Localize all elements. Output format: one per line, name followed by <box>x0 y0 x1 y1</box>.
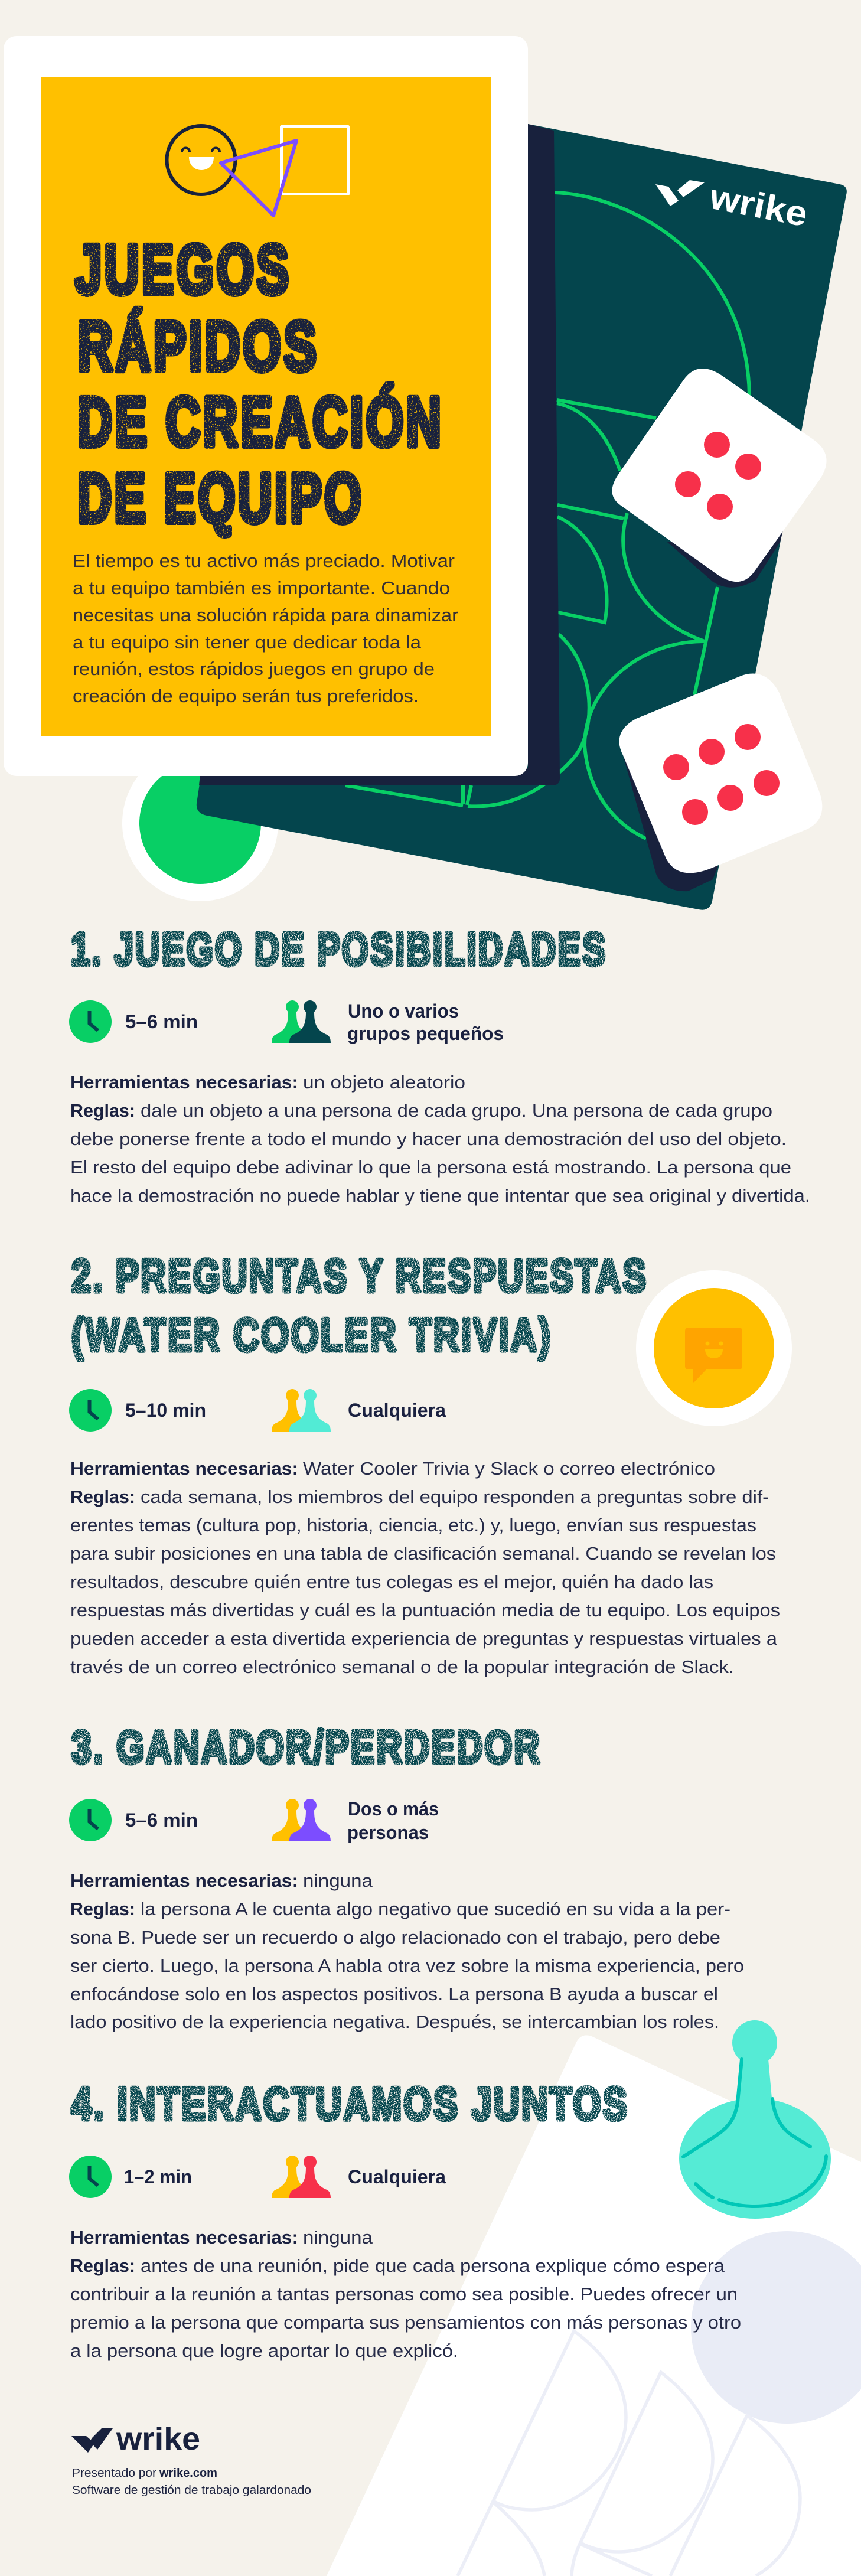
section 2 body: resultados, descubre quién entre tus colegas es el mejor, quién ha dado las <box>70 1571 713 1592</box>
section 3 body <box>70 1870 744 2032</box>
intro text: El tiempo es tu activo más preciado. Motivar <box>73 550 455 571</box>
section 3 heading: 3. GANADOR/PERDEDOR <box>71 1721 542 1773</box>
title: DE CREACIÓN <box>77 383 443 461</box>
section 4 body: Herramientas necesarias: <box>70 2227 298 2248</box>
die with six pips <box>619 673 822 891</box>
section 3 body: ser cierto. Luego, la persona A habla otra vez sobre la misma experiencia, pero <box>70 1955 744 1976</box>
section 4 body: ninguna <box>303 2227 373 2248</box>
section 2 body: erentes temas (cultura pop, historia, ciencia, etc.) y, luego, envían sus respuestas <box>70 1515 756 1535</box>
section 3 body: la persona A le cuenta algo negativo que sucedió en su vida a la per- <box>141 1899 730 1919</box>
section 2 body: cada semana, los miembros del equipo responden a preguntas sobre dif- <box>141 1486 769 1507</box>
section 3 body: sona B. Puede ser un recuerdo o algo relacionado con el trabajo, pero debe <box>70 1927 720 1948</box>
icon: pawns yellow and aqua <box>272 1389 331 1432</box>
section 1 body: debe ponerse frente a todo el mundo y hacer una demostración del uso del objeto. <box>70 1129 787 1149</box>
large aqua pawn <box>679 2020 831 2219</box>
group size 2: Cualquiera <box>348 1400 446 1421</box>
logo on board <box>655 177 811 234</box>
footer credit: Presentado por <box>72 2467 156 2480</box>
background: white triangle <box>327 2035 861 2576</box>
section 2 heading <box>71 1250 648 1361</box>
background: lavender circle <box>691 2231 861 2424</box>
section 2 heading: 2. PREGUNTAS Y RESPUESTAS <box>71 1250 648 1302</box>
icon: pawns yellow and purple <box>272 1799 331 1841</box>
group size 3: Dos o más <box>348 1798 439 1819</box>
intro text <box>73 550 458 706</box>
section 1 body: Herramientas necesarias: <box>70 1072 298 1093</box>
background: outlined shapes <box>458 2331 800 2576</box>
duration 1: 5–6 min <box>125 1011 198 1032</box>
group size 1 <box>347 1000 504 1044</box>
group size 3: personas <box>347 1822 429 1843</box>
section 2 heading: (WATER COOLER TRIVIA) <box>71 1309 552 1361</box>
section 4 body: contribuir a la reunión a tantas personas como sea posible. Puedes ofrecer un <box>70 2284 738 2304</box>
group size 4: Cualquiera <box>348 2166 446 2187</box>
board: green line pattern <box>345 193 749 839</box>
footer credit <box>72 2467 311 2497</box>
icon: clock 2 <box>69 1389 112 1432</box>
icon: clock 3 <box>69 1799 112 1841</box>
intro text: reunión, estos rápidos juegos en grupo de <box>73 658 435 679</box>
group size 3 <box>347 1798 439 1843</box>
group size 1: grupos pequeños <box>347 1023 504 1044</box>
section 1 body: un objeto aleatorio <box>303 1072 465 1093</box>
duration 4: 1–2 min <box>124 2166 192 2187</box>
icon: clock 1 <box>69 1000 112 1043</box>
intro text: necesitas una solución rápida para dinamizar <box>73 605 458 625</box>
section 3 body: enfocándose solo en los aspectos positivos. La persona B ayuda a buscar el <box>70 1984 718 2004</box>
navy card shadow <box>199 124 560 785</box>
footer credit: wrike.com <box>159 2467 217 2480</box>
intro text: creación de equipo serán tus preferidos. <box>73 686 419 706</box>
hero card <box>4 36 528 776</box>
footer logo <box>71 2421 200 2457</box>
section 1 body: El resto del equipo debe adivinar lo que la persona está mostrando. La persona que <box>70 1157 791 1178</box>
footer credit: Software de gestión de trabajo galardonado <box>72 2484 311 2497</box>
section 4 body: a la persona que logre aportar lo que explicó. <box>70 2340 458 2361</box>
game board <box>197 124 847 910</box>
section 1 body <box>70 1072 810 1206</box>
section 3 body: lado positivo de la experiencia negativa. Después, se intercambian los roles. <box>70 2011 719 2032</box>
logo on board: wrike <box>706 177 811 234</box>
title: JUEGOS <box>75 231 291 309</box>
icon: pawns yellow and red <box>272 2156 331 2198</box>
footer logo: wrike <box>116 2421 200 2457</box>
section 2 body: través de un correo electrónico semanal o de la popular integración de Slack. <box>70 1657 734 1677</box>
section 4 body: Reglas: <box>70 2255 135 2276</box>
icon: yellow circle with chat bubble <box>636 1270 792 1426</box>
title: DE EQUIPO <box>77 459 364 537</box>
section 2 body <box>70 1458 780 1677</box>
section 1 body: dale un objeto a una persona de cada grupo. Una persona de cada grupo <box>141 1100 772 1121</box>
icon: pawns green and teal <box>272 1000 331 1043</box>
intro text: a tu equipo sin tener que dedicar toda la <box>73 632 422 653</box>
group size 1: Uno o varios <box>348 1000 459 1022</box>
section 1 heading: 1. JUEGO DE POSIBILIDADES <box>71 923 607 975</box>
die with four pips <box>612 369 827 588</box>
intro text: a tu equipo también es importante. Cuando <box>73 578 450 598</box>
section 1 body: Reglas: <box>70 1100 135 1121</box>
section 1 body: hace la demostración no puede hablar y tiene que intentar que sea original y divertida. <box>70 1185 810 1206</box>
section 2 body: para subir posiciones en una tabla de clasificación semanal. Cuando se revelan los <box>70 1543 776 1564</box>
section 2 body: respuestas más divertidas y cuál es la puntuación media de tu equipo. Los equipos <box>70 1600 780 1620</box>
section 3 body: Herramientas necesarias: <box>70 1870 298 1891</box>
section 2 body: Herramientas necesarias: <box>70 1458 298 1479</box>
section 2 body: Water Cooler Trivia y Slack o correo electrónico <box>303 1458 715 1479</box>
title: RÁPIDOS <box>77 308 319 386</box>
section 2 body: pueden acceder a esta divertida experiencia de preguntas y respuestas virtuales a <box>70 1628 778 1649</box>
duration 2: 5–10 min <box>125 1400 206 1421</box>
icon: clock 4 <box>69 2156 112 2198</box>
section 4 body <box>70 2227 741 2361</box>
title <box>75 231 443 537</box>
section 4 heading: 4. INTERACTUAMOS JUNTOS <box>71 2078 629 2130</box>
section 4 body: premio a la persona que comparta sus pensamientos con más personas y otro <box>70 2312 741 2333</box>
green circle with white ring <box>122 745 278 901</box>
section 3 body: ninguna <box>303 1870 373 1891</box>
section 3 body: Reglas: <box>70 1899 135 1919</box>
icon: smiley, triangle and square <box>167 126 348 216</box>
section 2 body: Reglas: <box>70 1486 135 1507</box>
section 4 body: antes de una reunión, pide que cada persona explique cómo espera <box>141 2255 725 2276</box>
duration 3: 5–6 min <box>125 1809 198 1831</box>
